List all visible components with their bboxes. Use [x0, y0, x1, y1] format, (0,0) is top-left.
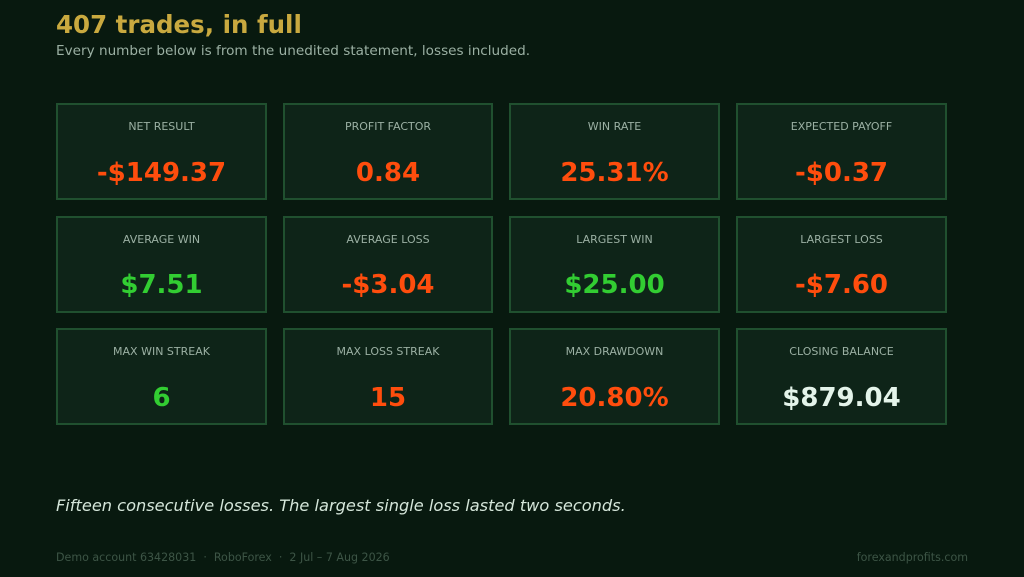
panel: average win: $7.51	[120, 270, 203, 300]
panel: max loss streak: 15	[370, 383, 406, 413]
panel: max loss streak: MAX LOSS STREAK	[337, 345, 439, 358]
panel: max win streak	[56, 328, 267, 425]
panel: largest loss: -$7.60	[795, 270, 888, 300]
panel: net result: NET RESULT	[128, 120, 195, 133]
panel: max drawdown: 20.80%	[560, 383, 669, 413]
panel: net result	[56, 103, 267, 200]
panel: profit factor	[283, 103, 493, 200]
footer: account details: Demo account 63428031 · RoboForex · 2 Jul – 7 Aug 2026	[56, 551, 390, 564]
footer: site: forexandprofits.com	[857, 551, 968, 564]
panel: win rate: WIN RATE	[588, 120, 641, 133]
panel: largest win: $25.00	[564, 270, 665, 300]
panel: profit factor: 0.84	[356, 158, 420, 188]
callout: Fifteen consecutive losses. The largest single loss lasted two seconds.	[56, 496, 626, 515]
panel: expected payoff	[736, 103, 947, 200]
panel: closing balance	[736, 328, 947, 425]
panel: average win	[56, 216, 267, 313]
panel: max loss streak	[283, 328, 493, 425]
panel: closing balance: $879.04	[782, 383, 901, 413]
panel: max win streak: MAX WIN STREAK	[113, 345, 210, 358]
panel: average loss: AVERAGE LOSS	[346, 233, 430, 246]
title: 407 trades, in full	[56, 10, 302, 39]
panel: average loss: -$3.04	[341, 270, 435, 300]
panel: largest loss: LARGEST LOSS	[800, 233, 883, 246]
panel: win rate	[509, 103, 720, 200]
subtitle: Every number below is from the unedited statement, losses included.	[56, 43, 530, 59]
panel: max win streak: 6	[152, 383, 171, 413]
panel: closing balance: CLOSING BALANCE	[789, 345, 894, 358]
panel: average win: AVERAGE WIN	[123, 233, 200, 246]
panel: max drawdown: MAX DRAWDOWN	[566, 345, 663, 358]
panel: largest win: LARGEST WIN	[576, 233, 653, 246]
panel: average loss	[283, 216, 493, 313]
panel: net result: -$149.37	[97, 158, 226, 188]
panel: max drawdown	[509, 328, 720, 425]
panel: largest win	[509, 216, 720, 313]
panel: expected payoff: -$0.37	[795, 158, 888, 188]
panel: largest loss	[736, 216, 947, 313]
panel: win rate: 25.31%	[560, 158, 669, 188]
panel: expected payoff: EXPECTED PAYOFF	[791, 120, 892, 133]
panel: profit factor: PROFIT FACTOR	[345, 120, 431, 133]
